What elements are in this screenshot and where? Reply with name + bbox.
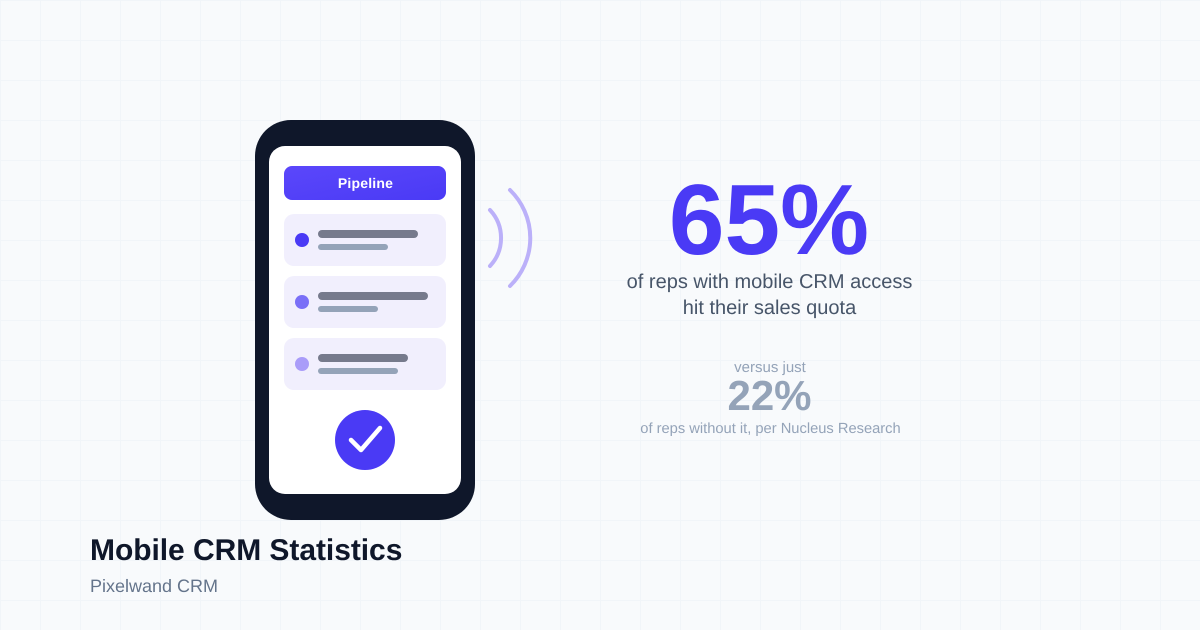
phone body <box>255 120 475 520</box>
main statistic description: hit their sales quota <box>683 297 856 319</box>
main statistic: 65% <box>669 164 869 276</box>
comparison description: of reps without it, per Nucleus Research <box>640 421 901 437</box>
pipeline header bar <box>284 166 446 200</box>
comparison lead-in: versus just <box>734 359 806 376</box>
list row 1 <box>284 214 446 266</box>
comparison statistic: 22% <box>727 372 812 419</box>
list row 2 <box>284 276 446 328</box>
subtitle: Pixelwand CRM <box>90 576 218 596</box>
icon: check badge <box>335 410 395 470</box>
list row 3 <box>284 338 446 390</box>
main statistic description <box>627 271 912 319</box>
phone screen <box>269 146 461 494</box>
phone illustration <box>255 120 475 520</box>
icon: signal waves <box>490 190 530 286</box>
title: Mobile CRM Statistics <box>90 534 402 567</box>
main statistic description: of reps with mobile CRM access <box>627 271 912 293</box>
pipeline label: Pipeline <box>338 175 393 191</box>
